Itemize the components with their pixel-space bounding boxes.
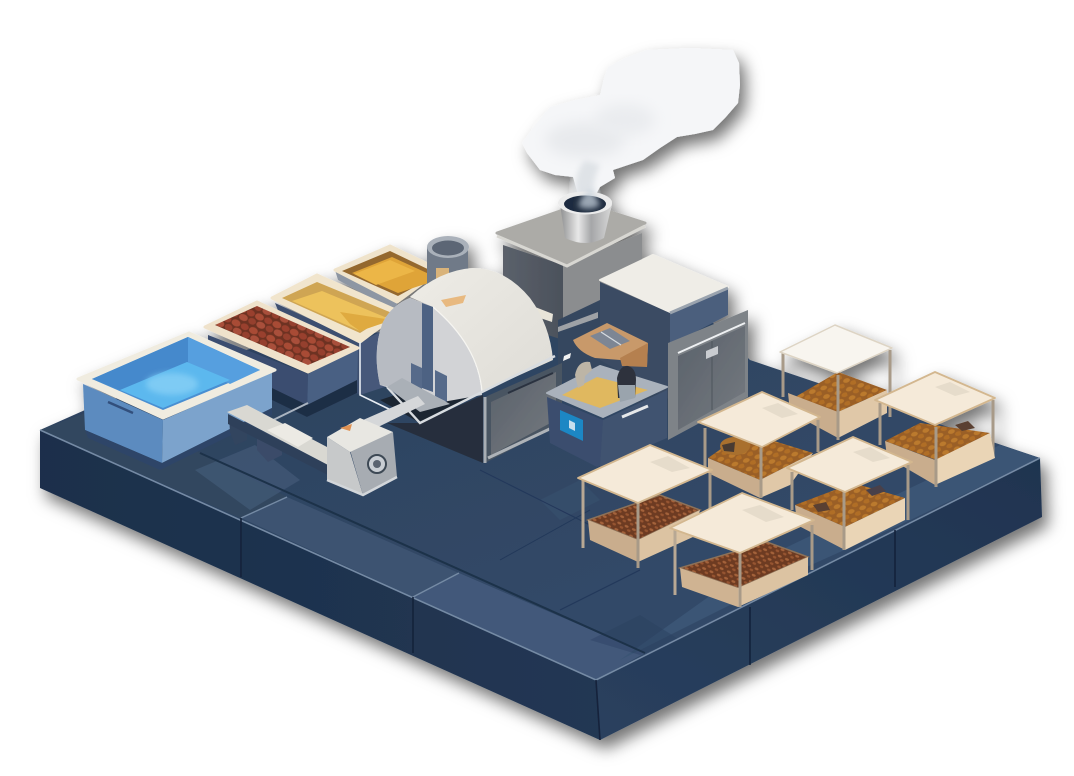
blue label: [560, 410, 583, 441]
tower body: [503, 245, 563, 340]
floor lip segment middle: [241, 497, 459, 597]
yellow bin middle: [272, 275, 400, 412]
tower with chimney: [497, 190, 645, 345]
grain: [562, 377, 648, 408]
platform: [40, 310, 1042, 740]
conveyor belt: [227, 396, 425, 475]
dark bottle: [617, 366, 636, 398]
motor block: [327, 418, 397, 495]
tower top plate: [497, 203, 645, 263]
floor lip segment left: [40, 400, 287, 518]
cylinder silo: [427, 236, 469, 300]
drum base: [387, 395, 483, 463]
cabinet top: [600, 255, 728, 312]
stand: back right: [780, 325, 892, 440]
stand: far right: [875, 372, 995, 487]
chimney bucket: [558, 190, 612, 243]
tank handle: [108, 402, 133, 413]
motor wheel: [368, 455, 386, 473]
platform floor: [40, 310, 1040, 680]
platform left side: [40, 430, 600, 740]
stand: center: [787, 437, 912, 550]
drum roaster: [377, 268, 571, 463]
yellow bin back: [335, 246, 440, 312]
floor lip segment front: [413, 573, 645, 680]
tan control box: [573, 323, 648, 367]
stand: left front: [578, 445, 712, 568]
stand: front: [670, 493, 814, 607]
orange tag: [441, 295, 466, 307]
hopper handle: [622, 406, 648, 417]
platform right side: [596, 458, 1042, 740]
drum end face: [377, 298, 482, 403]
stand: middle back: [698, 392, 820, 498]
dark cabinet: [558, 255, 728, 410]
tray outline: [387, 356, 555, 423]
hopper machine: [547, 323, 667, 467]
gray door unit: [668, 310, 748, 440]
drum vertical bar: [422, 303, 433, 392]
smoke plume: [522, 48, 740, 202]
drum shell: [410, 268, 553, 392]
brown bean bin: [205, 302, 358, 417]
hopper rim: [547, 366, 667, 417]
hopper body: [547, 397, 603, 467]
blue water tank: [78, 333, 275, 470]
